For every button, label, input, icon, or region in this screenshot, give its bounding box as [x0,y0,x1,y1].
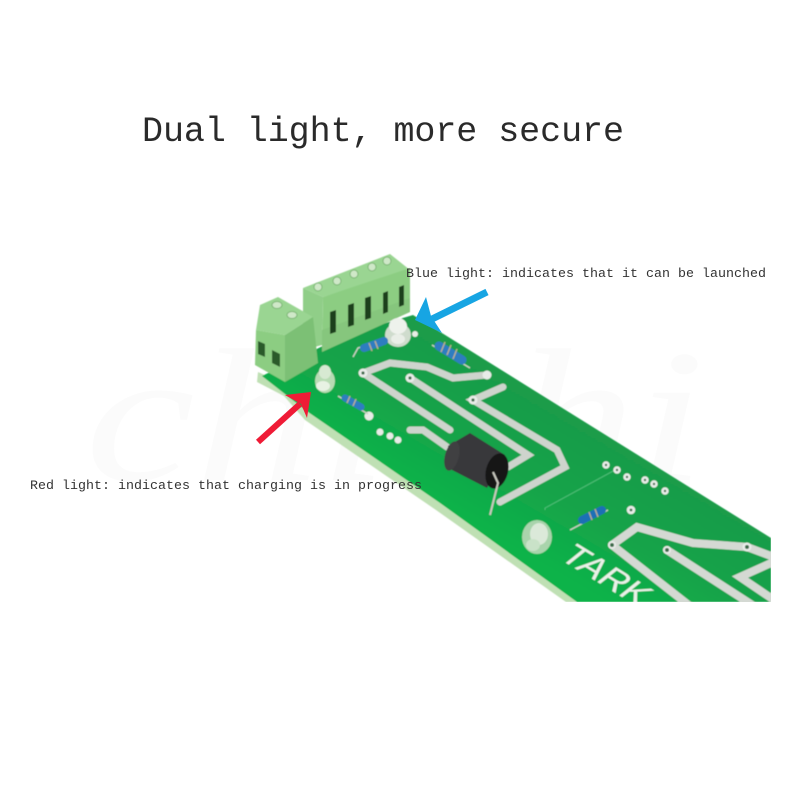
blue arrow [415,292,487,333]
title: Dual light, more secure [142,112,624,152]
watermark: chinhi [85,312,705,522]
board lettering: TARK [552,539,662,612]
faint trace lines [545,470,615,510]
silver traces right group [612,527,771,610]
infographic canvas [31,116,771,602]
silver traces left group [363,363,565,502]
crop mask bottom and right [560,530,800,625]
circuit board photo [255,254,771,612]
LED red light [315,365,335,393]
board body [262,315,771,602]
terminal block small [255,297,318,382]
red arrow [258,392,311,442]
resistor bands [347,341,598,520]
board lower edge [257,372,577,602]
blue light label: Blue light: indicates that it can be launched [406,266,766,281]
red light label: Red light: indicates that charging is in progress [30,478,422,493]
LED blue light [385,318,418,347]
transistor [441,433,512,515]
LED lower [522,520,552,554]
terminal block large [303,254,410,352]
resistors [338,339,608,530]
solder pads [359,369,751,554]
pad holes [361,371,749,552]
